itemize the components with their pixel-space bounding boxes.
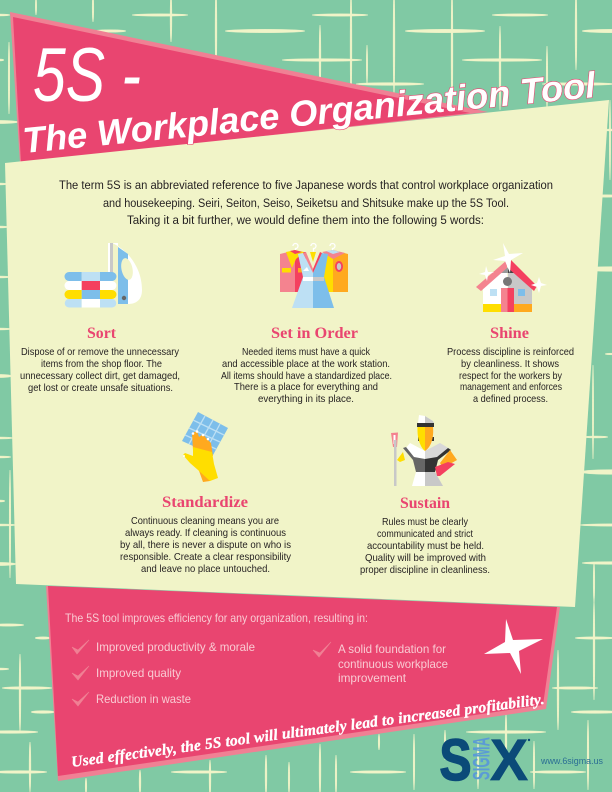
text: Standardize description: by all, there is never a dispute on who is (120, 540, 291, 551)
text: Shine description: Process discipline is reinforced (447, 347, 574, 358)
logo: Six Sigma: X (490, 728, 528, 792)
text: Shine description: by cleanliness. It shows (461, 359, 559, 370)
intro text: and housekeeping. Seiri, Seiton, Seiso, Seiketsu and Shitsuke make up the 5S Tool. (103, 196, 509, 210)
icon: maid with mop (391, 415, 457, 486)
panel: main cream body (5, 100, 609, 607)
heading: Set in Order: Set in Order (271, 325, 358, 342)
text: Standardize description: always ready. If cleaning is continuous (125, 528, 286, 539)
results list column 2 (313, 642, 448, 685)
results list column 1 (72, 640, 255, 706)
item: foundation: continuous workplace (338, 657, 448, 671)
intro text (59, 178, 553, 227)
text: website: www.6sigma.us (540, 756, 603, 766)
tagline: Used effectively, the 5S tool will ultimately lead to increased profitability. (70, 691, 545, 771)
text: Sustain description: Rules must be clearly (382, 517, 469, 528)
text: Sort description (20, 347, 180, 394)
icon: check 3 (72, 692, 89, 706)
text: Set in Order description: and accessible place at the work station. (222, 359, 390, 370)
text: Shine description (447, 347, 574, 405)
intro text: Taking it a bit further, we would define them into the following 5 words: (127, 213, 484, 227)
intro text: The term 5S is an abbreviated reference to five Japanese words that control workplace organization (59, 178, 553, 192)
text: Sustain description: Quality will be improved with (365, 553, 486, 564)
text: Shine description: respect for the workers by (459, 371, 563, 382)
text: Standardize description (120, 516, 292, 575)
icon: iron and folded fabric (64, 243, 142, 308)
item: waste: Reduction in waste (96, 692, 191, 706)
text: Set in Order description: There is a place for everything and (234, 382, 378, 393)
heading: Standardize: Standardize (162, 494, 248, 511)
icon: check 2 (72, 666, 89, 680)
text: Set in Order description: All items should have a standardized place. (221, 371, 392, 382)
item: foundation (338, 642, 448, 685)
item: productivity: Improved productivity & morale (96, 640, 255, 654)
logo: Six Sigma (440, 728, 530, 792)
icon: white star (484, 619, 543, 674)
text: results intro: The 5S tool improves efficiency for any organization, resulting in: (65, 611, 368, 625)
icon: shining house (476, 243, 547, 312)
text: Standardize description: Continuous cleaning means you are (131, 516, 279, 527)
text: Sustain description: accountability must be held. (367, 541, 484, 552)
text: Set in Order description: everything in its place. (258, 394, 354, 405)
text: Shine description: a defined process. (473, 394, 548, 405)
panel: title banner (10, 12, 488, 163)
title: 5S -: 5S - (33, 33, 141, 118)
text: Sustain description: communicated and strict (377, 529, 473, 540)
panel: results pink banner (46, 586, 560, 781)
text: Sort description: unnecessary collect dirt, get damaged, (20, 371, 180, 382)
item: quality: Improved quality (96, 666, 181, 680)
text: Sort description: Dispose of or remove the unnecessary (21, 347, 180, 358)
text: Standardize description: and leave no place untouched. (141, 564, 270, 575)
icon: check 1 (72, 640, 89, 654)
heading: Shine: Shine (490, 325, 529, 342)
item: foundation: A solid foundation for (338, 642, 446, 656)
text: Sustain description: proper discipline in cleanliness. (360, 565, 490, 576)
icon: clothes on hangers (280, 244, 348, 308)
text: Sort description: items from the shop floor. The (41, 359, 162, 370)
heading: Sort: Sort (87, 325, 117, 342)
icon: check 4 (313, 642, 331, 657)
logo: Six Sigma: SIGMA (468, 737, 496, 780)
item: foundation: improvement (338, 671, 407, 685)
text: Set in Order description: Needed items must have a quick (242, 347, 371, 358)
text: Sustain description (360, 517, 490, 576)
logo: Six Sigma: S (440, 728, 472, 792)
title: The Workplace Organization Tool: The Workplace Organization Tool (21, 64, 598, 161)
text: Shine description: management and enforces (460, 382, 562, 393)
text: Set in Order description (221, 347, 392, 405)
icon: yellow glove on tiles (182, 412, 228, 482)
text: Standardize description: responsible. Create a clear responsibility (120, 552, 292, 563)
heading: Sustain: Sustain (400, 495, 450, 512)
text: Sort description: get lost or create unsafe situations. (28, 383, 173, 394)
